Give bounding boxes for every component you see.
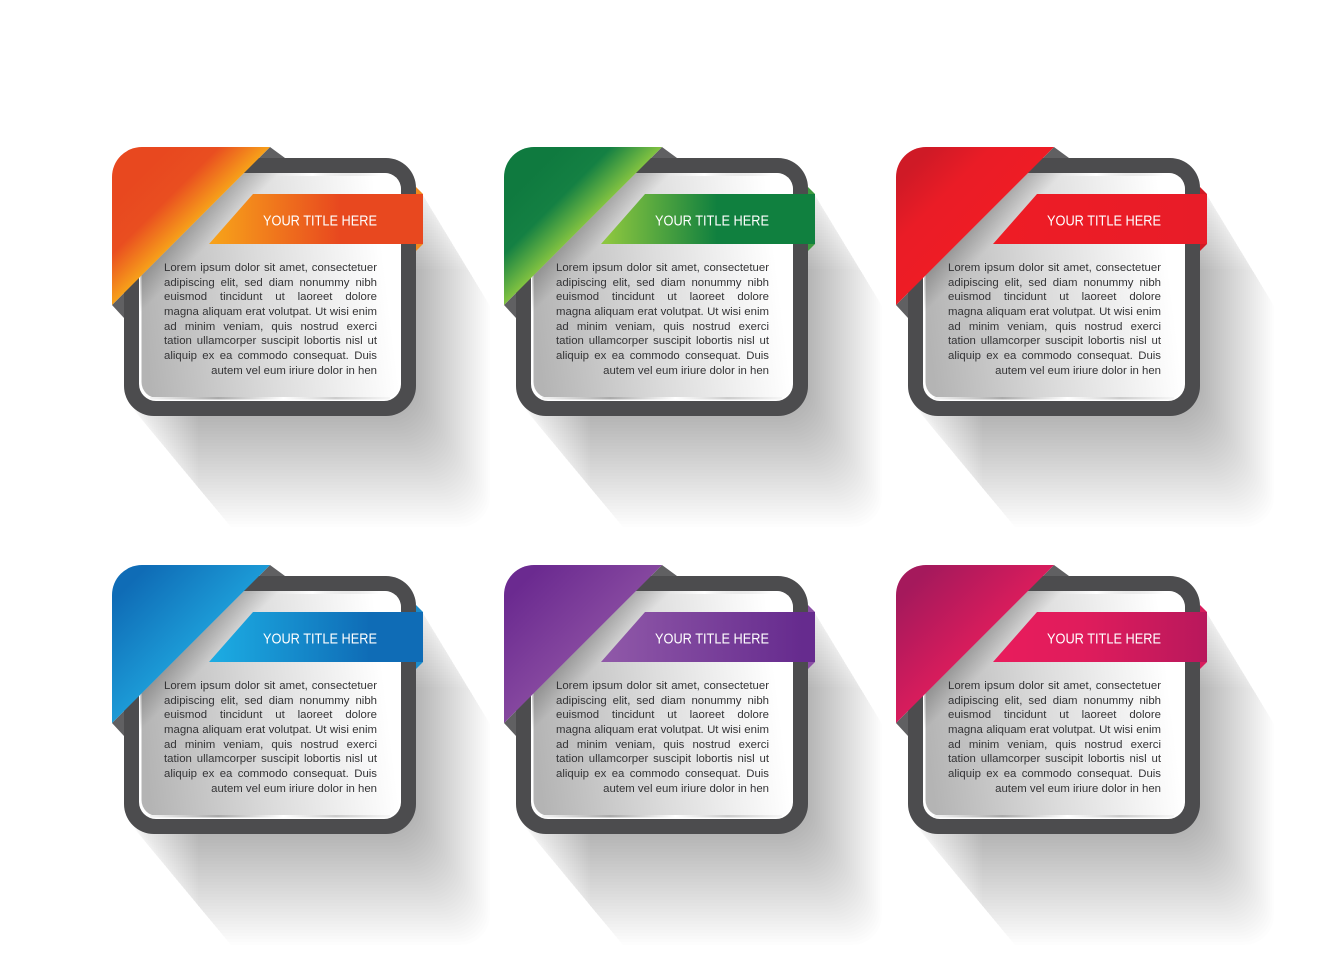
body text: magna aliquam erat volutpat. Ut wisi enim <box>556 306 769 318</box>
body text: adipiscing elit, sed diam nonummy nibh <box>948 277 1161 289</box>
corner ribbon <box>112 147 270 305</box>
body text <box>948 262 1161 377</box>
title ribbon <box>209 612 423 662</box>
body text: Lorem ipsum dolor sit amet, consectetuer <box>556 262 769 274</box>
title ribbon fold <box>416 605 423 669</box>
title ribbon <box>601 612 815 662</box>
body text: euismod tincidunt ut laoreet dolore <box>948 709 1161 721</box>
body text: Lorem ipsum dolor sit amet, consectetuer <box>948 262 1161 274</box>
title: YOUR TITLE HERE <box>1047 214 1161 230</box>
title ribbon fold <box>416 187 423 251</box>
body text: autem vel eum iriure dolor in hen <box>211 783 377 795</box>
body text: adipiscing elit, sed diam nonummy nibh <box>556 277 769 289</box>
card: red <box>896 147 1266 515</box>
body text: aliquip ex ea commodo consequat. Duis <box>164 350 377 362</box>
body text: autem vel eum iriure dolor in hen <box>603 783 769 795</box>
body text: tation ullamcorper suscipit lobortis nisl ut <box>948 335 1161 347</box>
title ribbon fold <box>1200 187 1207 251</box>
body text: Lorem ipsum dolor sit amet, consectetuer <box>948 680 1161 692</box>
body text: adipiscing elit, sed diam nonummy nibh <box>556 695 769 707</box>
body text: aliquip ex ea commodo consequat. Duis <box>948 768 1161 780</box>
body text <box>164 262 377 377</box>
body text: adipiscing elit, sed diam nonummy nibh <box>164 695 377 707</box>
body text <box>556 680 769 795</box>
title ribbon <box>601 194 815 244</box>
body text: autem vel eum iriure dolor in hen <box>995 783 1161 795</box>
body text: euismod tincidunt ut laoreet dolore <box>948 291 1161 303</box>
body text <box>164 680 377 795</box>
body text: ad minim veniam, quis nostrud exerci <box>164 321 377 333</box>
title: YOUR TITLE HERE <box>655 214 769 230</box>
body text: autem vel eum iriure dolor in hen <box>211 365 377 377</box>
body text: tation ullamcorper suscipit lobortis nisl ut <box>556 335 769 347</box>
body text: adipiscing elit, sed diam nonummy nibh <box>948 695 1161 707</box>
card: orange <box>112 147 482 515</box>
body text: magna aliquam erat volutpat. Ut wisi enim <box>948 724 1161 736</box>
card: magenta <box>896 565 1266 933</box>
body text: magna aliquam erat volutpat. Ut wisi enim <box>164 306 377 318</box>
body text: magna aliquam erat volutpat. Ut wisi enim <box>164 724 377 736</box>
body text: ad minim veniam, quis nostrud exerci <box>948 321 1161 333</box>
body text: aliquip ex ea commodo consequat. Duis <box>556 768 769 780</box>
body text <box>948 680 1161 795</box>
body text: tation ullamcorper suscipit lobortis nisl ut <box>556 753 769 765</box>
body text: adipiscing elit, sed diam nonummy nibh <box>164 277 377 289</box>
body text: aliquip ex ea commodo consequat. Duis <box>556 350 769 362</box>
body text: euismod tincidunt ut laoreet dolore <box>556 291 769 303</box>
body text: autem vel eum iriure dolor in hen <box>995 365 1161 377</box>
title ribbon <box>993 194 1207 244</box>
body text: magna aliquam erat volutpat. Ut wisi enim <box>556 724 769 736</box>
body text: euismod tincidunt ut laoreet dolore <box>556 709 769 721</box>
corner ribbon <box>112 565 270 723</box>
title: YOUR TITLE HERE <box>1047 632 1161 648</box>
body text: ad minim veniam, quis nostrud exerci <box>556 739 769 751</box>
title ribbon fold <box>808 605 815 669</box>
body text: euismod tincidunt ut laoreet dolore <box>164 709 377 721</box>
body text: tation ullamcorper suscipit lobortis nisl ut <box>948 753 1161 765</box>
title ribbon fold <box>808 187 815 251</box>
corner ribbon <box>504 147 662 305</box>
body text: aliquip ex ea commodo consequat. Duis <box>948 350 1161 362</box>
body text: tation ullamcorper suscipit lobortis nisl ut <box>164 335 377 347</box>
body text: ad minim veniam, quis nostrud exerci <box>164 739 377 751</box>
card: blue <box>112 565 482 933</box>
body text: tation ullamcorper suscipit lobortis nisl ut <box>164 753 377 765</box>
body text: Lorem ipsum dolor sit amet, consectetuer <box>556 680 769 692</box>
body text: ad minim veniam, quis nostrud exerci <box>556 321 769 333</box>
body text: euismod tincidunt ut laoreet dolore <box>164 291 377 303</box>
body text: Lorem ipsum dolor sit amet, consectetuer <box>164 262 377 274</box>
title ribbon <box>993 612 1207 662</box>
body text <box>556 262 769 377</box>
body text: Lorem ipsum dolor sit amet, consectetuer <box>164 680 377 692</box>
title: YOUR TITLE HERE <box>263 632 377 648</box>
body text: magna aliquam erat volutpat. Ut wisi enim <box>948 306 1161 318</box>
title: YOUR TITLE HERE <box>655 632 769 648</box>
body text: aliquip ex ea commodo consequat. Duis <box>164 768 377 780</box>
title: YOUR TITLE HERE <box>263 214 377 230</box>
title ribbon <box>209 194 423 244</box>
card: green <box>504 147 874 515</box>
title ribbon fold <box>1200 605 1207 669</box>
corner ribbon <box>504 565 662 723</box>
body text: autem vel eum iriure dolor in hen <box>603 365 769 377</box>
card: purple <box>504 565 874 933</box>
corner ribbon <box>896 565 1054 723</box>
body text: ad minim veniam, quis nostrud exerci <box>948 739 1161 751</box>
corner ribbon <box>896 147 1054 305</box>
